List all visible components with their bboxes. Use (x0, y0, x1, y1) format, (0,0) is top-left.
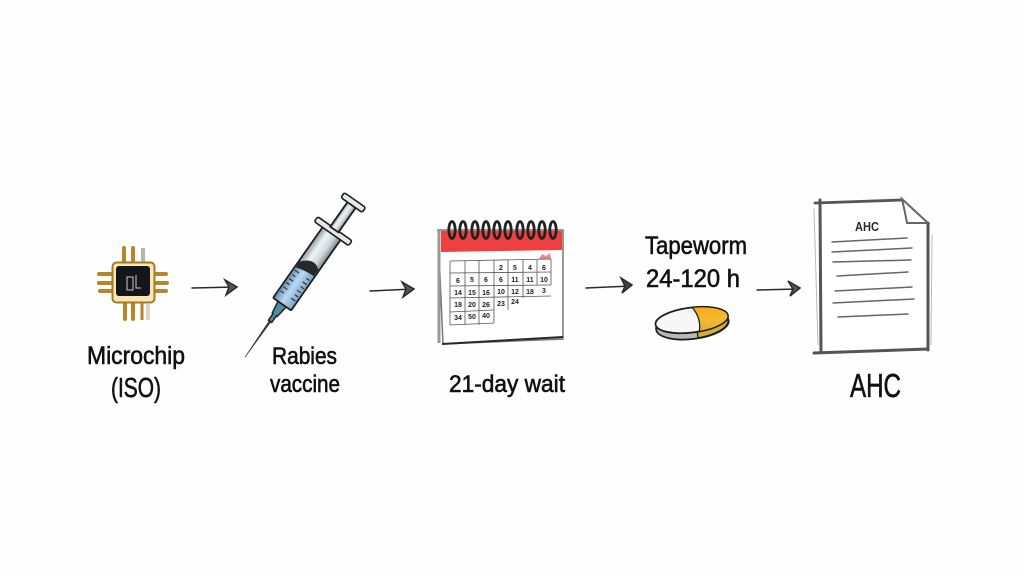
icon: calendar: 50 (468, 314, 476, 321)
icon: calendar: 6 (456, 278, 460, 285)
icon: pill (654, 303, 730, 343)
icon: calendar: 18 (526, 289, 534, 296)
step: 21-day wait (438, 222, 565, 398)
icon: calendar: 23 (497, 301, 505, 308)
icon: calendar: 4 (528, 265, 532, 272)
icon: calendar: 24 (511, 299, 519, 306)
icon: calendar: 34 (454, 315, 462, 322)
text: AHC document title: AHC (855, 220, 879, 234)
icon: calendar: 14 (454, 290, 462, 297)
label: Microchip (ISO): (ISO) (111, 372, 161, 403)
icon: calendar: 5 (470, 277, 474, 284)
icon: calendar: 5 (513, 265, 517, 272)
label: Rabies vaccine: vaccine (270, 371, 340, 398)
icon: calendar: 20 (468, 302, 476, 309)
label: Microchip (ISO): Microchip (87, 342, 185, 370)
icon: calendar: 11 (511, 277, 519, 284)
label: Rabies vaccine: Rabies (272, 343, 337, 370)
icon: calendar: 16 (482, 290, 490, 297)
arrow: tapeworm to AHC (757, 281, 800, 296)
icon: calendar: 2 (499, 265, 503, 272)
label: Tapeworm 24-120 h: Tapeworm (645, 232, 747, 260)
icon: calendar: 11 (526, 277, 534, 284)
icon: microchip (99, 248, 167, 320)
arrow: vaccine to calendar (370, 282, 414, 297)
icon: calendar: 18 (454, 302, 462, 309)
label: 21-day wait: 21-day wait (449, 371, 565, 398)
icon: syringe (228, 188, 372, 369)
icon: calendar: 40 (482, 313, 490, 320)
icon: calendar: 12 (511, 289, 519, 296)
step: rabies vaccine (228, 188, 372, 398)
icon: calendar: 10 (497, 289, 505, 296)
icon: calendar (438, 222, 563, 344)
arrow: microchip to vaccine (192, 280, 237, 295)
icon: calendar: 10 (540, 277, 548, 284)
icon: calendar: 26 (482, 302, 490, 309)
step: microchip (87, 248, 185, 403)
arrow: calendar to tapeworm (586, 278, 632, 293)
icon: calendar: 6 (499, 277, 503, 284)
label: Tapeworm 24-120 h: 24-120 h (646, 265, 740, 293)
icon: calendar: 3 (542, 288, 546, 295)
icon: calendar: 15 (468, 290, 476, 297)
icon: calendar: 6 (542, 265, 546, 272)
step: AHC (814, 199, 932, 404)
step: tapeworm treatment (645, 232, 747, 343)
label: AHC: AHC (850, 367, 901, 404)
icon: calendar: 6 (484, 277, 488, 284)
icon: AHC document (814, 199, 932, 353)
